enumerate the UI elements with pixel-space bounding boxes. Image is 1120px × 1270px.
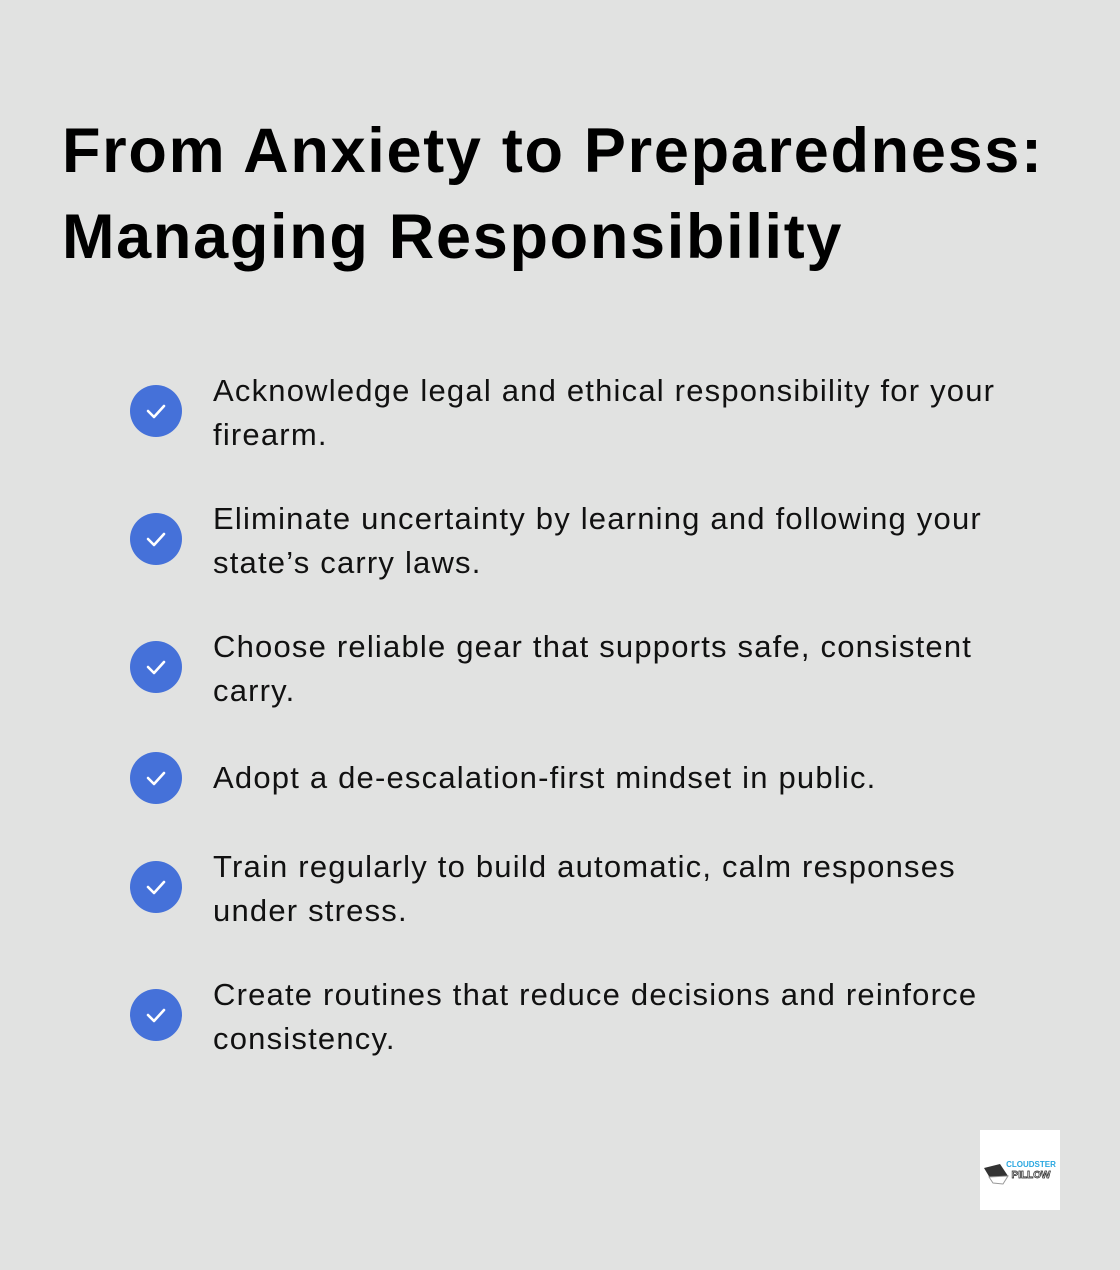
item 1 bbox=[130, 373, 995, 452]
icon: check bbox=[130, 513, 182, 565]
text: carry. bbox=[213, 673, 295, 708]
text: Acknowledge legal and ethical responsibility for your bbox=[213, 373, 995, 408]
icon: check bbox=[130, 989, 182, 1041]
title: From Anxiety to Preparedness: bbox=[62, 116, 1044, 186]
item 5 bbox=[130, 849, 956, 928]
item 3 bbox=[130, 629, 972, 708]
icon: check bbox=[130, 641, 182, 693]
icon: check bbox=[130, 861, 182, 913]
text: state’s carry laws. bbox=[213, 545, 482, 580]
icon: check bbox=[130, 752, 182, 804]
text: under stress. bbox=[213, 893, 408, 928]
item 4 bbox=[130, 752, 876, 804]
text: Eliminate uncertainty by learning and following your bbox=[213, 501, 982, 536]
text: Create routines that reduce decisions and reinforce bbox=[213, 977, 977, 1012]
icon: check bbox=[130, 385, 182, 437]
logo: PILLOW bbox=[1012, 1170, 1051, 1181]
text: firearm. bbox=[213, 417, 328, 452]
text: Adopt a de-escalation-first mindset in public. bbox=[213, 760, 876, 795]
text bbox=[213, 501, 982, 580]
logo: CLOUDSTER bbox=[1006, 1160, 1056, 1169]
title bbox=[62, 116, 1044, 272]
logo bbox=[980, 1130, 1060, 1210]
item 6 bbox=[130, 977, 977, 1056]
text bbox=[213, 629, 972, 708]
text bbox=[213, 373, 995, 452]
item 2 bbox=[130, 501, 982, 580]
text bbox=[213, 849, 956, 928]
text: Train regularly to build automatic, calm responses bbox=[213, 849, 956, 884]
title: Managing Responsibility bbox=[62, 202, 843, 272]
text: consistency. bbox=[213, 1021, 396, 1056]
text: Choose reliable gear that supports safe, consistent bbox=[213, 629, 972, 664]
text bbox=[213, 977, 977, 1056]
